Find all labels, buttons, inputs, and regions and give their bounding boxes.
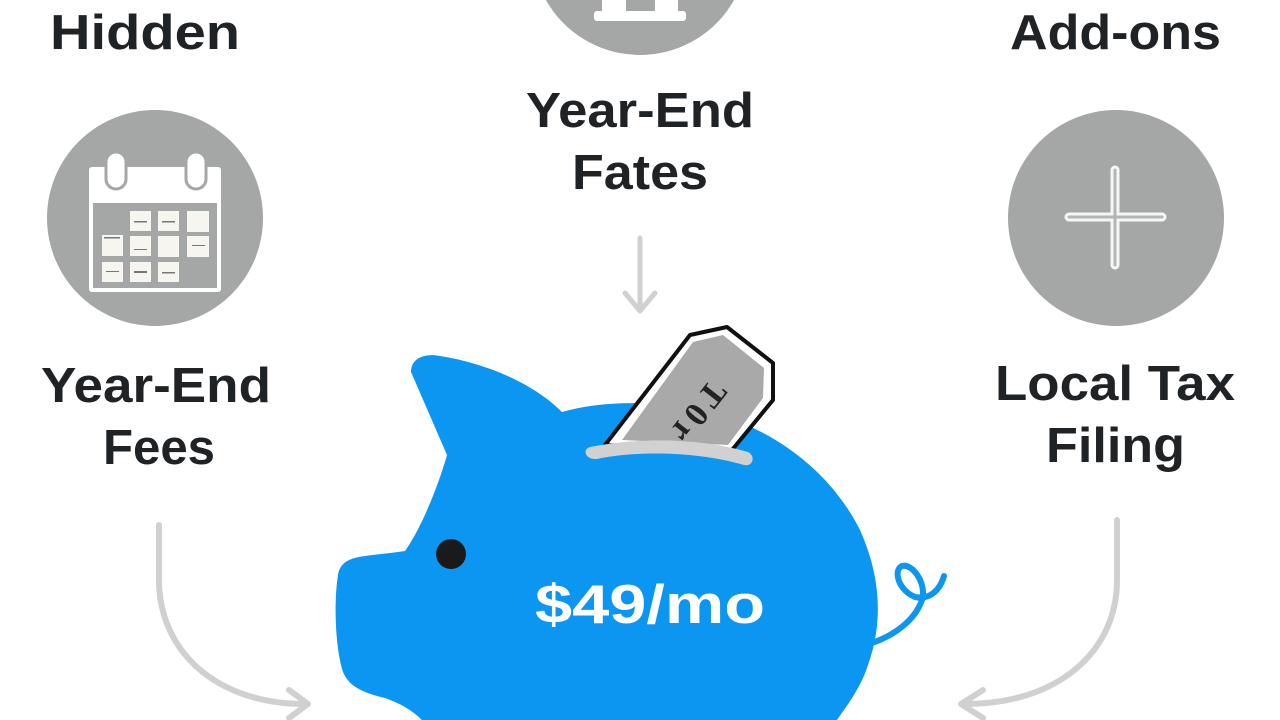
label: Local Tax Filing [995,357,1235,473]
label: Local Tax Filing: Filing [1046,419,1185,473]
heading: Hidden: Hidden [50,6,240,60]
arrow: left curved to pig [159,525,308,718]
icon: coin tag entering slot: T0r [659,373,733,454]
icon: calendar in circle [47,110,263,326]
label: Year-End Fates [526,84,754,200]
icon: coin tag entering slot [605,327,773,454]
icon: curly pig tail [872,566,944,643]
label: Local Tax Filing: Local Tax [995,357,1235,411]
icon: plus in circle [1008,110,1224,326]
coin slot [586,440,753,465]
arrow: right curved to pig [961,520,1117,718]
label: Year-End Fates: Year-End [526,84,754,138]
illustration: blue piggy bank [336,355,878,720]
price label: $49/mo [535,573,765,635]
eye [436,539,466,569]
arrow: center down [625,238,655,311]
label: Year-End Fees [41,359,271,475]
label: Year-End Fees: Fees [103,421,215,475]
heading: Add-ons: Add-ons [1010,6,1221,60]
icon: bank building in circle [532,0,748,55]
label: Year-End Fees: Year-End [41,359,271,413]
label: Year-End Fates: Fates [572,146,708,200]
